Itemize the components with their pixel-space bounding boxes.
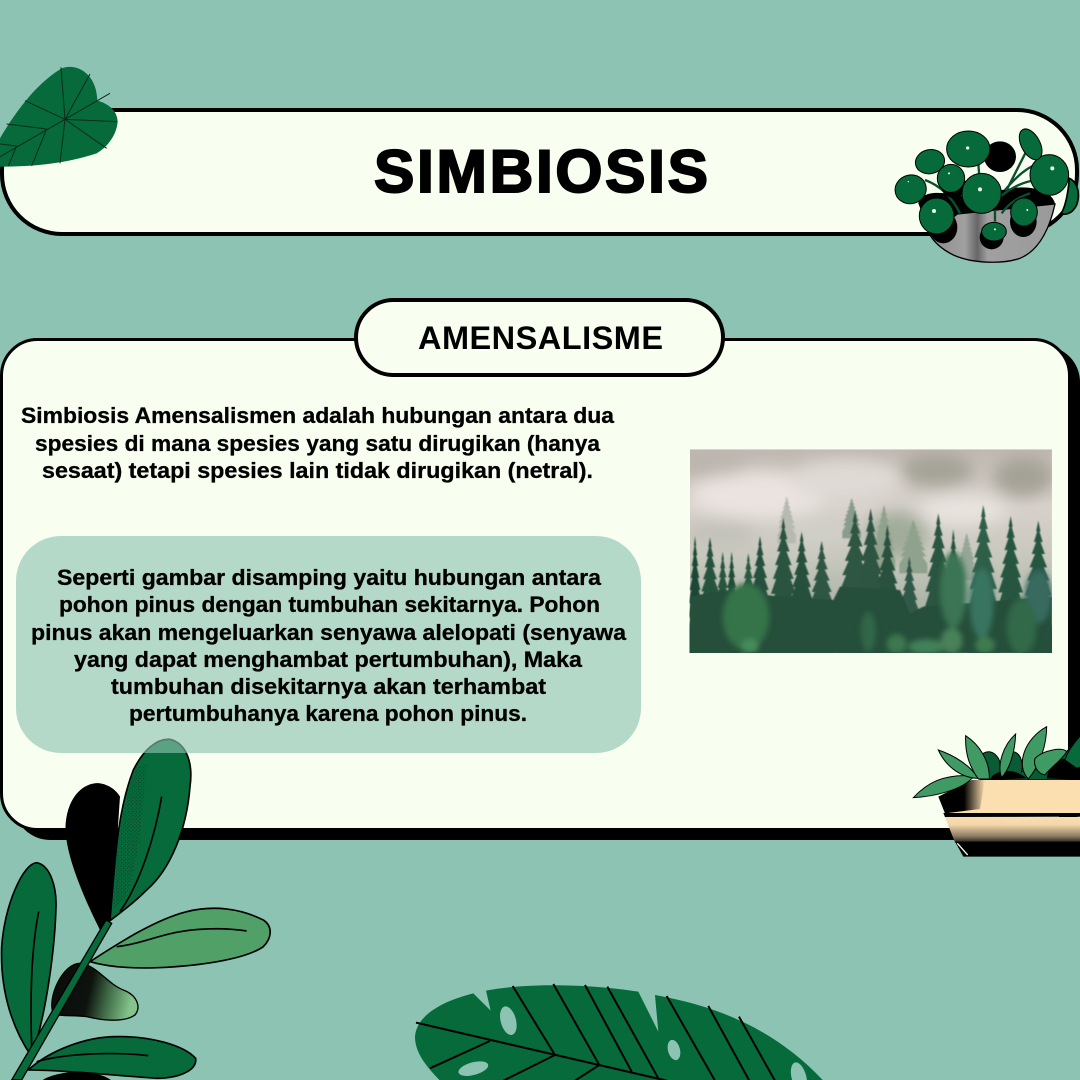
- back foliage: [980, 733, 1080, 780]
- distant trees: [842, 498, 861, 538]
- black back leaf: [65, 783, 120, 930]
- leaf body: [415, 985, 823, 1080]
- light leaf vein: [117, 929, 247, 947]
- bottom leaf vein: [37, 1054, 148, 1062]
- leaf spots: [908, 146, 1054, 230]
- planter leaves: [913, 727, 1067, 798]
- example text: tumbuhan disekitarnya akan terhambat: [111, 674, 547, 699]
- leaf stipple: [113, 763, 147, 910]
- title: SIMBIOSIS: [374, 137, 708, 205]
- round leaves: [892, 125, 1069, 241]
- light leaf: [90, 908, 270, 968]
- icon: planter box right: [913, 727, 1080, 857]
- example text: pohon pinus dengan tumbuhan sekitarnya. Pohon: [59, 592, 600, 617]
- big upper leaf: [110, 739, 191, 921]
- example text: yang dapat menghambat pertumbuhan), Maka: [74, 647, 583, 672]
- icon: potted plant top right: [892, 125, 1078, 262]
- title banner: [2, 110, 1077, 234]
- planter upper body: [938, 780, 1080, 813]
- leaf shadows: [929, 174, 1037, 249]
- stems: [925, 147, 1043, 222]
- definition text: sesaat) tetapi spesies lain tidak dirugikan (netral).: [42, 458, 593, 483]
- example callout box: [16, 536, 641, 753]
- panel shadow: [14, 346, 1080, 840]
- lighter foliage: [723, 552, 1052, 655]
- dark right leaf: [1065, 734, 1080, 768]
- planter lower body: [945, 817, 1080, 842]
- black foliage: [990, 759, 1080, 780]
- definition text: spesies di mana spesies yang satu dirugikan (hanya: [35, 431, 601, 456]
- planter highlight: [957, 843, 968, 855]
- planter band: [943, 813, 1080, 817]
- left leaf: [2, 863, 56, 1057]
- big leaf vein: [120, 797, 162, 912]
- example text: Seperti gambar disamping yaitu hubungan antara: [57, 565, 602, 590]
- planter base: [955, 842, 1080, 857]
- example text: pertumbuhanya karena pohon pinus.: [129, 701, 527, 726]
- definition text: [21, 403, 615, 483]
- example text: pinus akan mengeluarkan senyawa alelopati (senyawa: [31, 620, 627, 645]
- leaf veins: [416, 984, 775, 1080]
- left leaf vein: [31, 912, 39, 1047]
- bottom leaf: [28, 1037, 196, 1078]
- icon: heart leaf top left: [0, 67, 118, 167]
- leaf holes: [457, 1005, 810, 1080]
- black leaf bottom: [42, 1072, 112, 1080]
- planter left shade: [938, 780, 985, 813]
- black foliage backing: [918, 187, 1055, 233]
- example text: [31, 565, 627, 726]
- photo: misty pine forest: [670, 449, 1054, 657]
- plant pot handle leaf: [1048, 178, 1078, 225]
- icon: monstera leaf bottom centre: [415, 984, 823, 1080]
- black leaf back: [984, 141, 1016, 172]
- main trees: [690, 536, 701, 653]
- icon: branch plant bottom left: [2, 739, 270, 1080]
- small speckled leaf: [52, 963, 138, 1020]
- section heading: AMENSALISME: [418, 320, 663, 356]
- bowl: [930, 204, 1055, 262]
- main panel: [2, 340, 1070, 830]
- stem: [12, 920, 112, 1080]
- definition text: Simbiosis Amensalismen adalah hubungan antara dua: [21, 403, 615, 428]
- forest floor: [690, 587, 1052, 653]
- section heading pill: [356, 300, 723, 375]
